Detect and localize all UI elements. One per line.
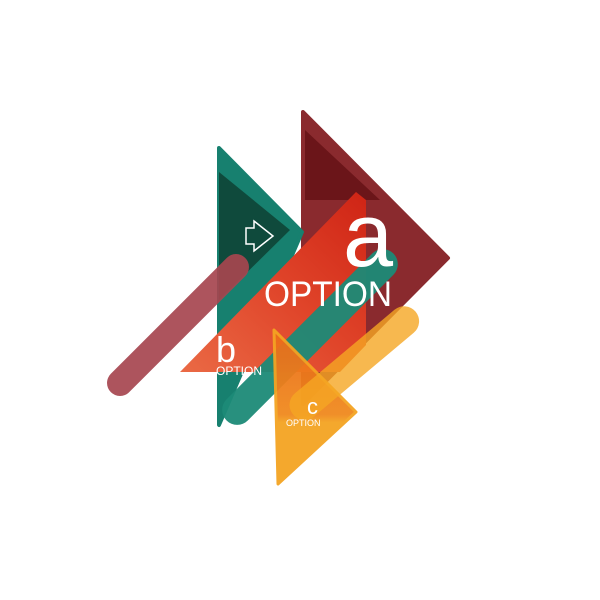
text: c: c	[307, 394, 318, 419]
shape: teal bar	[216, 243, 404, 431]
text: OPTION main: OPTION	[264, 275, 392, 314]
shape: dark red triangle	[303, 112, 448, 404]
text: OPTION b: OPTION	[216, 364, 262, 378]
shape: orange bar	[283, 300, 425, 426]
text: b: b	[216, 329, 236, 370]
shape: orange triangle	[274, 330, 356, 484]
text: OPTION c: OPTION	[286, 418, 321, 428]
shape: mauve bar	[102, 249, 254, 401]
shape: red-orange arrow body	[180, 192, 366, 372]
icon: arrow outline	[246, 221, 273, 251]
text: a: a	[343, 186, 394, 286]
shape: green triangle	[219, 148, 302, 425]
